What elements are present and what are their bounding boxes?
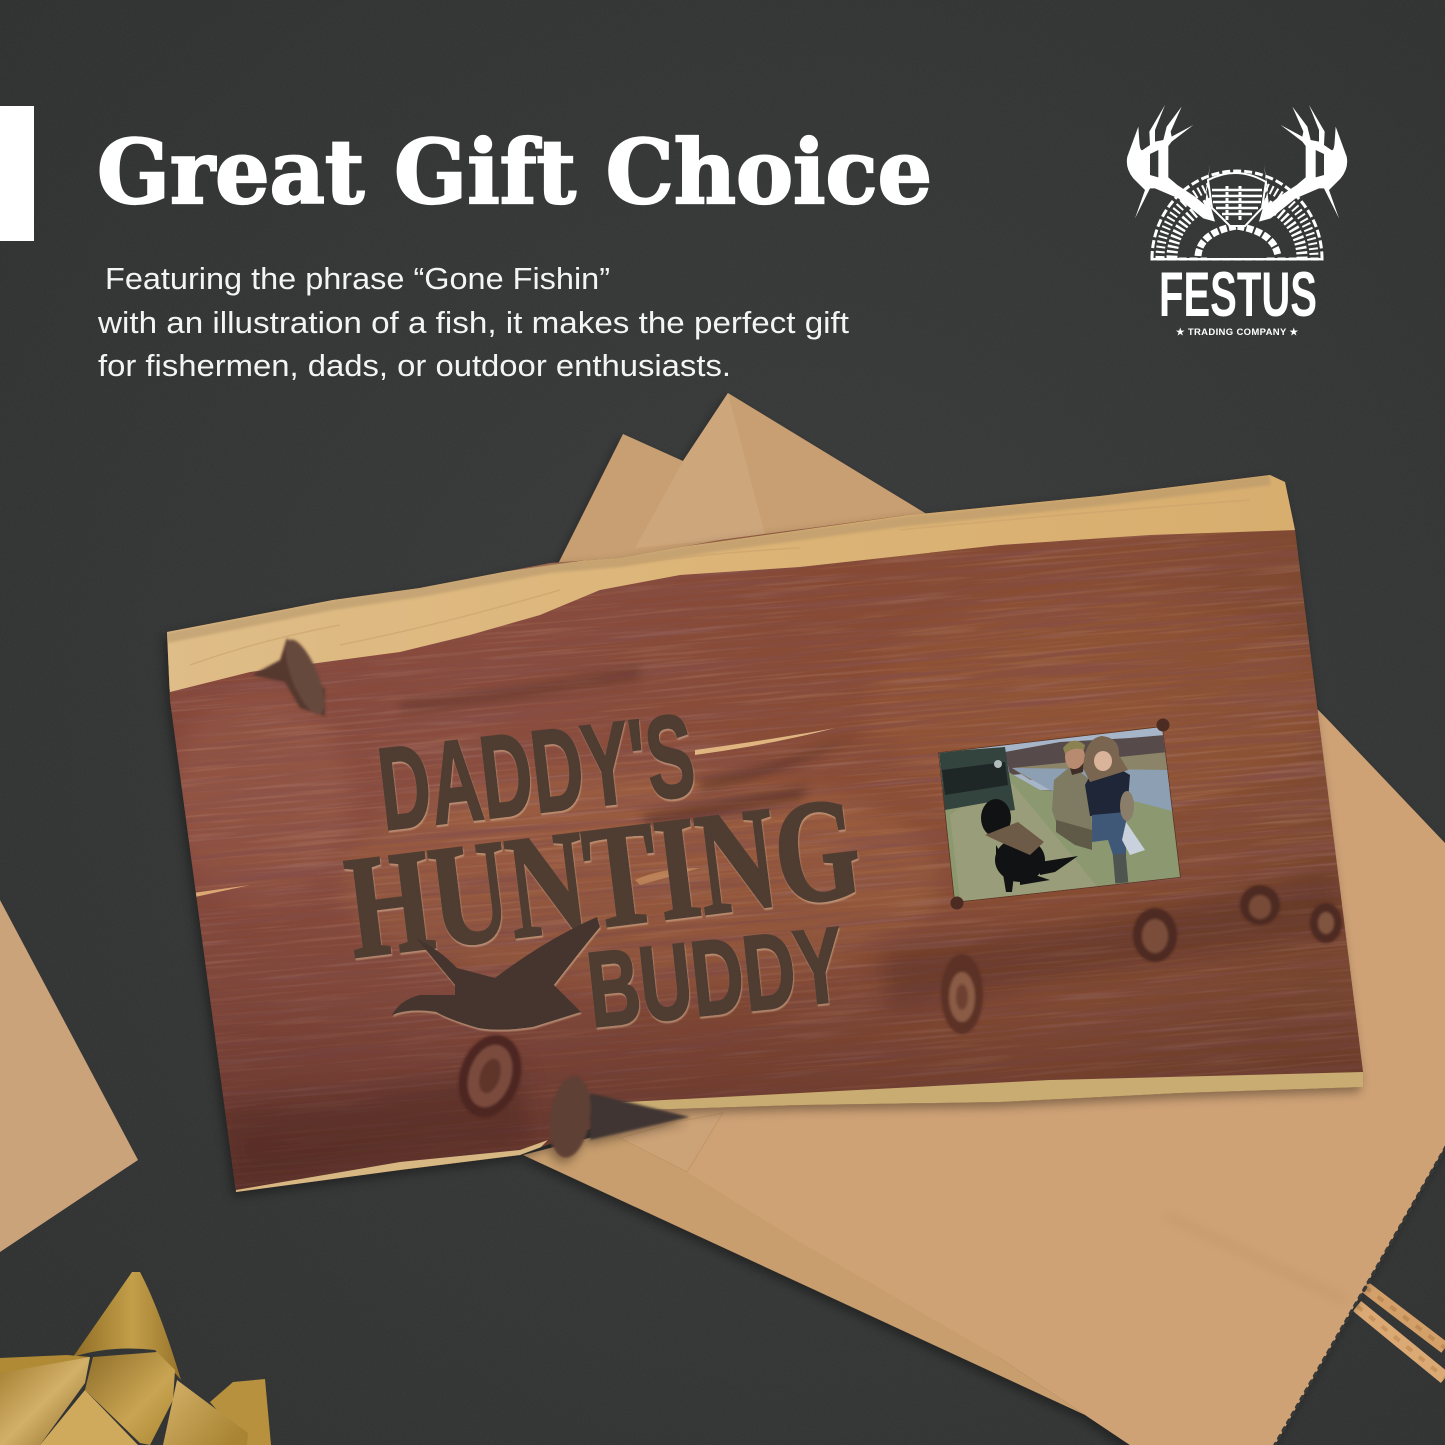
description text: for fishermen, dads, or outdoor enthusiasts. xyxy=(98,349,731,383)
knot far right xyxy=(1310,903,1342,943)
logo right antler xyxy=(1259,105,1347,222)
logo turkey fan xyxy=(1151,171,1322,260)
photo pin top right xyxy=(1156,718,1170,732)
bag crease xyxy=(1165,1215,1345,1300)
sapwood top edge xyxy=(160,460,1300,692)
knot bottom edge xyxy=(544,1074,690,1160)
knots xyxy=(252,635,1342,1160)
knot bottom centre xyxy=(448,1027,532,1125)
bag main panel xyxy=(620,640,1445,1445)
photo pin bottom left xyxy=(950,896,964,910)
wood grain xyxy=(169,532,1362,1186)
sliver highlights xyxy=(695,728,835,755)
water xyxy=(1012,768,1176,815)
logo left antler xyxy=(1127,105,1215,222)
knot right lower xyxy=(941,954,983,1034)
pinned photo xyxy=(930,718,1185,910)
gift box xyxy=(0,900,138,1252)
dog vest xyxy=(985,822,1044,855)
engraved HUNTING: HUNTING xyxy=(338,767,868,989)
heartwood xyxy=(150,460,1380,1210)
engraved wording xyxy=(338,691,868,1050)
sapwood grain lines xyxy=(190,500,1250,665)
logo tagline: ★ TRADING COMPANY ★ xyxy=(1176,327,1298,338)
lower dark shading xyxy=(203,922,1363,1190)
bark edge xyxy=(167,480,1270,638)
logo: Festus Trading Company xyxy=(1127,105,1347,338)
dark streaks xyxy=(220,665,1345,1185)
bag triangular fold xyxy=(620,1113,723,1172)
man xyxy=(1052,741,1092,850)
wooden board xyxy=(163,475,1366,1197)
gold ribbon bow xyxy=(0,1272,271,1445)
far bank xyxy=(1012,752,1172,780)
knot right mid xyxy=(1133,908,1177,962)
sky xyxy=(939,728,1170,790)
knot right upper xyxy=(1240,885,1280,925)
warm centre glow xyxy=(340,770,940,990)
bag serrated edge xyxy=(1275,1147,1445,1445)
description text: Featuring the phrase “Gone Fishin” xyxy=(105,262,610,296)
tree line xyxy=(1005,735,1168,775)
vehicle xyxy=(939,747,1015,812)
bag lower layer xyxy=(523,1130,1150,1445)
white accent bar xyxy=(0,106,34,241)
engraved BUDDY: BUDDY xyxy=(582,905,849,1050)
knot top left xyxy=(252,635,332,719)
description text xyxy=(97,262,850,383)
title: Great Gift Choice xyxy=(97,120,932,224)
engraved DADDY'S: DADDY'S xyxy=(372,691,701,856)
boy xyxy=(1083,736,1145,883)
sapwood bottom edge xyxy=(607,1072,1365,1112)
photo scene xyxy=(939,728,1180,901)
dog xyxy=(981,799,1078,892)
kraft paper bag handle xyxy=(1357,1287,1445,1378)
kraft paper bag xyxy=(523,393,1445,1445)
bag back flap xyxy=(540,393,1000,700)
engraved duck silhouette xyxy=(392,917,600,1030)
photo paper xyxy=(939,727,1180,902)
grass xyxy=(945,770,1182,905)
logo wordmark: FESTUS xyxy=(1159,260,1317,330)
description text: with an illustration of a fish, it makes the perfect gift xyxy=(97,306,850,340)
